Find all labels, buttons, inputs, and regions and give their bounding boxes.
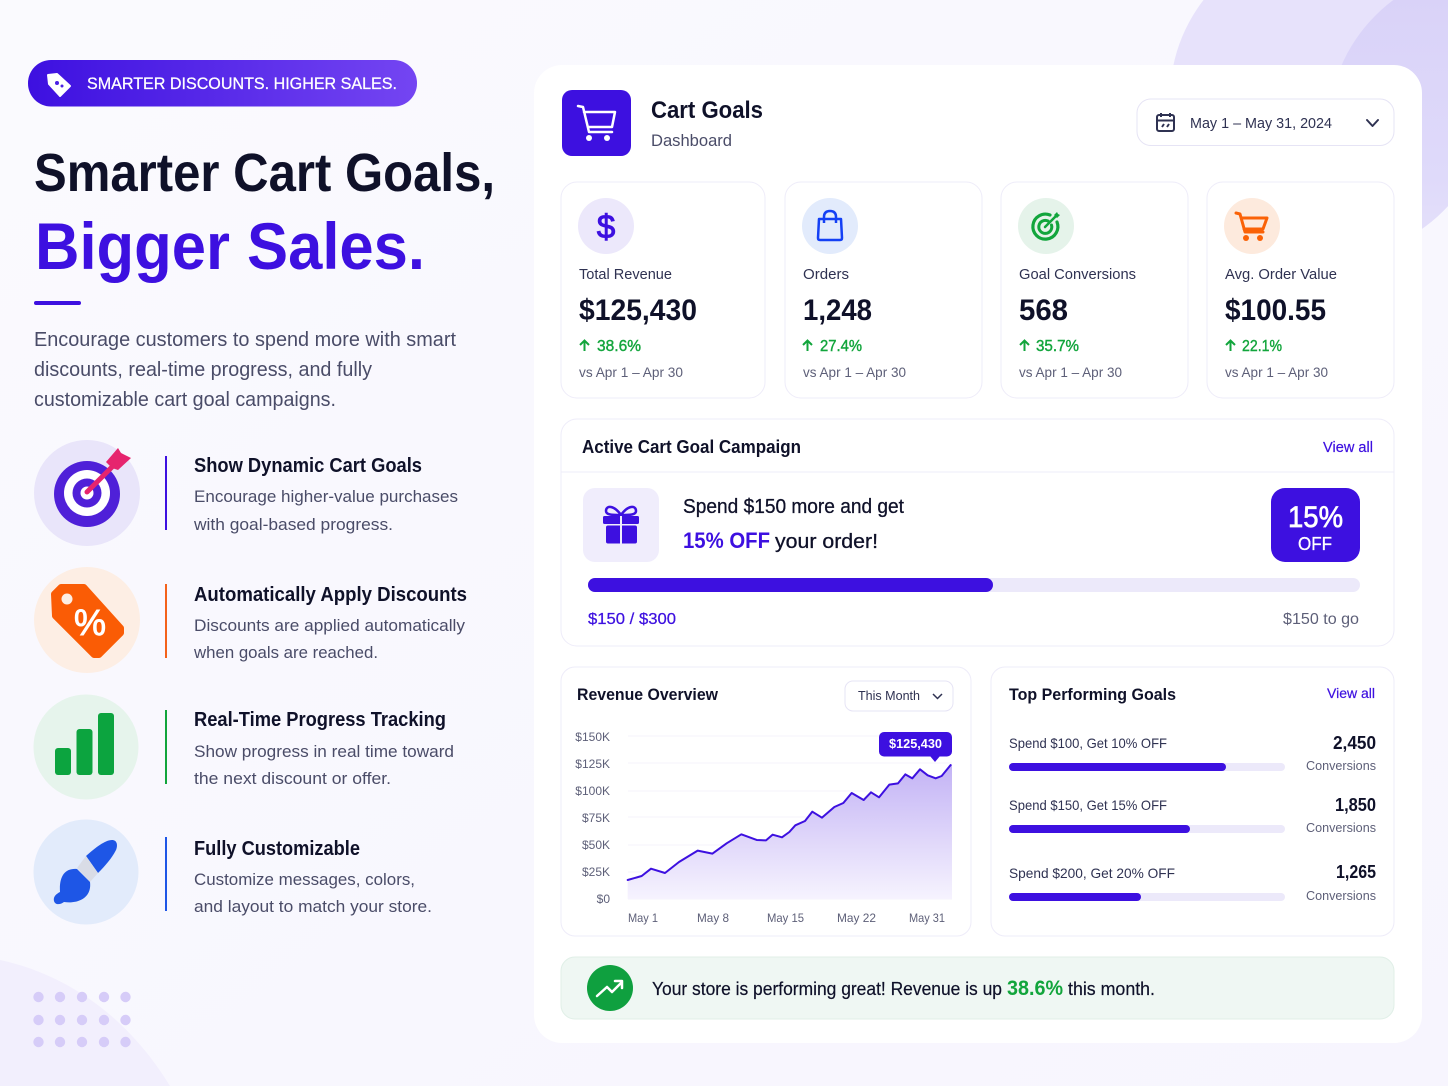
callout text: [652, 977, 1155, 1000]
feature: dynamic cart goals: [34, 440, 458, 546]
icon: trending up: [587, 965, 633, 1011]
stat card: orders: Orders: [803, 266, 849, 283]
description: the next discount or offer.: [194, 769, 391, 788]
dashboard header: [562, 90, 1394, 156]
stat card: total revenue: Total Revenue: [579, 266, 672, 283]
icon: chevron down: [1367, 120, 1378, 126]
icon: orange cart: [1224, 198, 1280, 254]
x axis labels: May 1: [628, 911, 658, 925]
x axis labels: [628, 911, 945, 925]
stat card: total revenue: $125,430: [579, 294, 697, 327]
feature: automatically apply discounts: [34, 567, 467, 673]
heading: Show Dynamic Cart Goals: [194, 455, 422, 477]
description: Discounts are applied automatically: [194, 616, 466, 635]
icon: price tag: [48, 74, 70, 96]
goal row 2: Spend $150, Get 15% OFF: [1009, 797, 1167, 813]
trend: up: 22.1%: [1242, 338, 1282, 355]
description: Customize messages, colors,: [194, 870, 415, 889]
goals heading: Top Performing Goals: [1009, 685, 1176, 704]
feature: fully customizable: [34, 820, 432, 924]
intro paragraph: Encourage customers to spend more with smart: [34, 329, 456, 351]
stat card: total revenue: vs Apr 1 – Apr 30: [579, 364, 683, 380]
heading: Real-Time Progress Tracking: [194, 709, 446, 731]
discount badge: 15%: [1288, 501, 1343, 534]
goal row 3: Conversions: [1306, 888, 1376, 903]
campaign heading: Active Cart Goal Campaign: [582, 437, 801, 457]
stat card: average order value: vs Apr 1 – Apr 30: [1225, 364, 1328, 380]
discount badge: OFF: [1298, 534, 1332, 554]
tooltip: $125,430: [889, 736, 942, 751]
stat card: total revenue: [561, 182, 765, 398]
intro paragraph: [34, 329, 456, 411]
y axis labels: $100K: [575, 784, 610, 798]
icon: percent tag: %: [74, 602, 106, 643]
x axis labels: May 31: [909, 911, 945, 925]
intro paragraph: customizable cart goal campaigns.: [34, 389, 336, 411]
feature: real-time progress tracking: [34, 694, 454, 800]
goal row 2: [1009, 795, 1376, 835]
campaign message: Spend $150 more and get: [683, 496, 904, 518]
description: [194, 742, 454, 788]
goal row 3: 1,265: [1336, 862, 1376, 882]
period dropdown: This Month: [858, 688, 920, 703]
callout text: Your store is performing great! Revenue is up: [652, 979, 1002, 999]
title: Smarter Cart Goals,: [34, 143, 495, 203]
description: when goals are reached.: [193, 643, 378, 662]
description: and layout to match your store.: [194, 897, 432, 916]
stat card: goal conversions: 568: [1019, 294, 1068, 327]
description: Encourage higher-value purchases: [194, 487, 458, 506]
progress amount: $150 / $300: [588, 611, 676, 628]
y axis labels: $75K: [582, 811, 610, 825]
icon: bar chart: [34, 694, 138, 800]
campaign message: your order!: [775, 531, 878, 553]
goal row 1: 2,450: [1333, 733, 1376, 753]
y axis labels: $150K: [575, 730, 610, 744]
campaign message: 15% OFF: [683, 528, 770, 553]
date range picker: [1137, 99, 1394, 146]
revenue line: [628, 765, 952, 899]
decorative dot grid: [33, 992, 131, 1047]
icon: goal target: [1018, 198, 1074, 254]
view all link: View all: [1327, 685, 1375, 701]
goal row 2: 1,850: [1335, 795, 1376, 815]
stat card: goal conversions: vs Apr 1 – Apr 30: [1019, 364, 1122, 380]
goal row 3: [1009, 862, 1376, 903]
stat card: goal conversions: Goal Conversions: [1019, 266, 1136, 283]
icon: percent tag: [34, 567, 140, 673]
stat card: orders: vs Apr 1 – Apr 30: [803, 364, 906, 380]
badge: smarter discounts: [28, 60, 417, 106]
stat card: average order value: [1207, 182, 1394, 398]
description: [194, 870, 432, 916]
title: Bigger Sales.: [35, 209, 425, 283]
y axis labels: $50K: [582, 838, 610, 852]
goal row 3: Spend $200, Get 20% OFF: [1009, 865, 1175, 881]
stat card: average order value: Avg. Order Value: [1225, 266, 1337, 283]
chart heading: Revenue Overview: [577, 685, 719, 704]
title accent underline: [34, 301, 81, 305]
panel: active campaign: [561, 419, 1394, 646]
icon: calendar: [1157, 113, 1174, 131]
goal row 1: Conversions: [1306, 758, 1376, 773]
trend: up: 38.6%: [597, 338, 641, 355]
stat card: average order value: $100.55: [1225, 294, 1326, 327]
stat card: orders: [785, 182, 982, 398]
stat card: orders: 1,248: [803, 294, 872, 327]
trend: up: 35.7%: [1036, 338, 1079, 355]
dashboard subtitle: Dashboard: [651, 131, 732, 150]
heading: Fully Customizable: [194, 838, 360, 860]
y axis labels: [575, 730, 610, 906]
line chart: [575, 730, 952, 925]
x axis labels: May 15: [767, 911, 804, 925]
period dropdown: [845, 681, 953, 711]
icon: gift: [583, 488, 659, 562]
callout text: 38.6%: [1007, 977, 1063, 1000]
description: with goal-based progress.: [193, 515, 393, 534]
icon: dollar: $: [597, 208, 615, 245]
description: [193, 616, 466, 662]
panel: top performing goals: [991, 667, 1394, 936]
trend: up: [803, 338, 862, 355]
y axis labels: $0: [597, 892, 610, 906]
view all link: View all: [1323, 439, 1373, 456]
x axis labels: May 8: [697, 911, 729, 925]
badge text: SMARTER DISCOUNTS. HIGHER SALES.: [87, 74, 397, 93]
callout: performance message: [561, 957, 1394, 1019]
trend: up: 27.4%: [820, 338, 862, 355]
y axis labels: $25K: [582, 865, 610, 879]
icon: target with arrow: [34, 440, 140, 546]
trend: up: [1226, 338, 1282, 355]
panel: dashboard: [534, 65, 1422, 1043]
intro paragraph: discounts, real-time progress, and fully: [34, 359, 372, 381]
icon: cart logo: [562, 90, 631, 156]
progress bar: [588, 578, 1360, 592]
title: [34, 143, 495, 283]
campaign message: [683, 496, 904, 553]
stat card: goal conversions: [1001, 182, 1188, 398]
y axis labels: $125K: [575, 757, 610, 771]
heading: Automatically Apply Discounts: [194, 584, 467, 606]
icon: shopping bag: [802, 198, 858, 254]
date range picker: May 1 – May 31, 2024: [1190, 115, 1332, 132]
description: [193, 487, 458, 534]
x axis labels: May 22: [837, 911, 876, 925]
goal row 1: Spend $100, Get 10% OFF: [1009, 735, 1167, 751]
goal row 1: [1009, 733, 1376, 773]
callout text: this month.: [1068, 979, 1155, 999]
icon: dollar: [578, 198, 634, 254]
description: Show progress in real time toward: [194, 742, 454, 761]
panel: revenue overview: [561, 667, 971, 936]
dashboard title: Cart Goals: [651, 97, 763, 124]
remaining amount: $150 to go: [1283, 611, 1359, 628]
discount badge: [1271, 488, 1360, 562]
tooltip: [879, 732, 952, 762]
icon: paint brush: [34, 820, 138, 924]
goal row 2: Conversions: [1306, 820, 1376, 835]
